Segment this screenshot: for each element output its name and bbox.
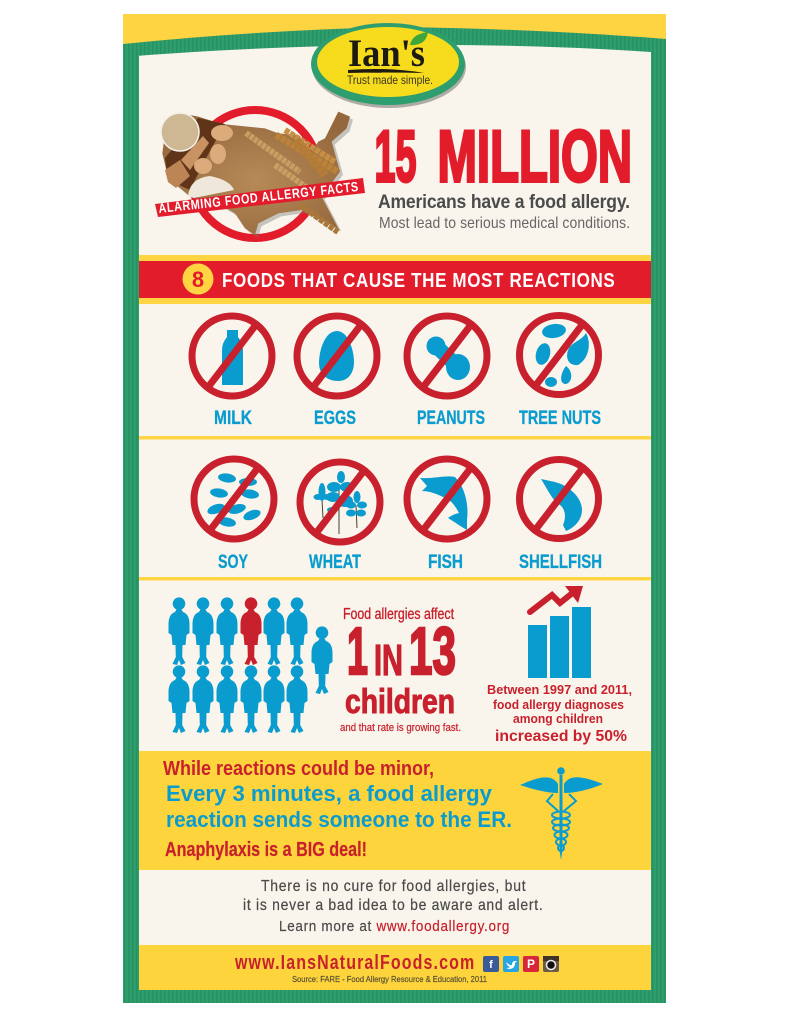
icon: facebook [483, 956, 499, 972]
stat: 1 in 13 children: IN [374, 636, 403, 685]
bowl of oats [161, 113, 199, 151]
wheat [246, 130, 338, 232]
stat: increased by 50%: food allergy diagnoses [493, 697, 624, 712]
headline: 15 million [374, 116, 632, 198]
label: eggs: EGGS [314, 408, 356, 429]
logo [311, 23, 466, 108]
icon: fish [407, 459, 487, 539]
pictogram: children [168, 597, 332, 733]
top green band [123, 27, 666, 57]
text block: no cure: There is no cure for food allergies, but [261, 878, 526, 895]
panel: ER warning: reaction sends someone to the ER. [166, 807, 512, 832]
headline: 15 million: 15 [374, 116, 416, 198]
icon: tree nuts [520, 316, 598, 394]
stat: 1 in 13 children: Food allergies affect [343, 606, 454, 623]
icon: shellfish [520, 460, 598, 538]
divider 1 [139, 436, 651, 440]
subhead 2: Most lead to serious medical conditions. [379, 215, 630, 232]
icon: pinterest: P [527, 957, 535, 971]
rolling pin [181, 136, 209, 170]
logo: Ian's [348, 32, 425, 75]
label: shellfish: SHELLFISH [519, 552, 602, 573]
eggs [194, 125, 233, 174]
stat: increased by 50%: Between 1997 and 2011, [487, 682, 632, 697]
stat: 1 in 13 children: 13 [409, 614, 456, 689]
label: peanuts: PEANUTS [417, 408, 485, 429]
flour bowl [188, 176, 234, 198]
map of USA with food photo [161, 112, 353, 238]
section heading band: FOODS THAT CAUSE THE MOST REACTIONS [222, 269, 615, 291]
label: milk: MILK [214, 408, 252, 429]
label: fish: FISH [428, 552, 463, 573]
panel: footer [139, 945, 651, 990]
panel: ER warning: While reactions could be minor, [163, 758, 434, 780]
icon: soy [194, 459, 274, 539]
panel: footer: www.IansNaturalFoods.com [234, 951, 474, 973]
stat: 1 in 13 children: children [345, 683, 455, 721]
section heading band [139, 255, 651, 304]
text block: no cure: Learn more at www.foodallergy.org [279, 918, 509, 935]
icon: wheat [300, 462, 380, 542]
stat: 1 in 13 children [340, 606, 461, 734]
bar chart with rising arrow [528, 586, 591, 678]
icon: facebook: f [489, 959, 493, 971]
subhead: Americans have a food allergy. [378, 190, 630, 212]
banner: alarming food allergy facts: ALARMING FOOD ALLERGY FACTS [158, 179, 359, 216]
icon: twitter [503, 956, 519, 972]
frame [123, 14, 666, 1003]
text block: no cure [243, 878, 543, 935]
logo: Trust made simple. [347, 73, 433, 87]
label: tree nuts: TREE NUTS [519, 408, 601, 429]
panel: footer: Source: FARE - Food Allergy Resource & Education, 2011 [292, 974, 487, 984]
text block: no cure: it is never a bad idea to be aware and alert. [243, 897, 543, 914]
stat: 1 in 13 children: and that rate is growing fast. [340, 722, 461, 734]
icon: instagram [543, 956, 559, 972]
stat: 1 in 13 children: 1 [347, 614, 368, 689]
stat: increased by 50%: among children [513, 711, 603, 726]
no symbol ring behind map [191, 110, 319, 238]
paper panel [139, 44, 651, 990]
stat: increased by 50%: increased by 50% [495, 728, 627, 745]
label: soy: SOY [218, 552, 248, 573]
panel: ER warning [139, 751, 651, 870]
panel: ER warning: Anaphylaxis is a BIG deal! [165, 839, 367, 861]
stat: increased by 50% [487, 682, 632, 745]
panel: ER warning: Every 3 minutes, a food allergy [166, 781, 493, 806]
headline: 15 million: MILLION [438, 116, 632, 198]
icon: milk [192, 316, 272, 396]
icon: eggs [297, 316, 377, 396]
divider 2 [139, 577, 651, 580]
icon: peanuts [407, 316, 487, 396]
section heading band: 8 [192, 267, 204, 292]
icon: pinterest [523, 956, 539, 972]
label: wheat: WHEAT [309, 552, 361, 573]
icon: caduceus [520, 767, 603, 860]
